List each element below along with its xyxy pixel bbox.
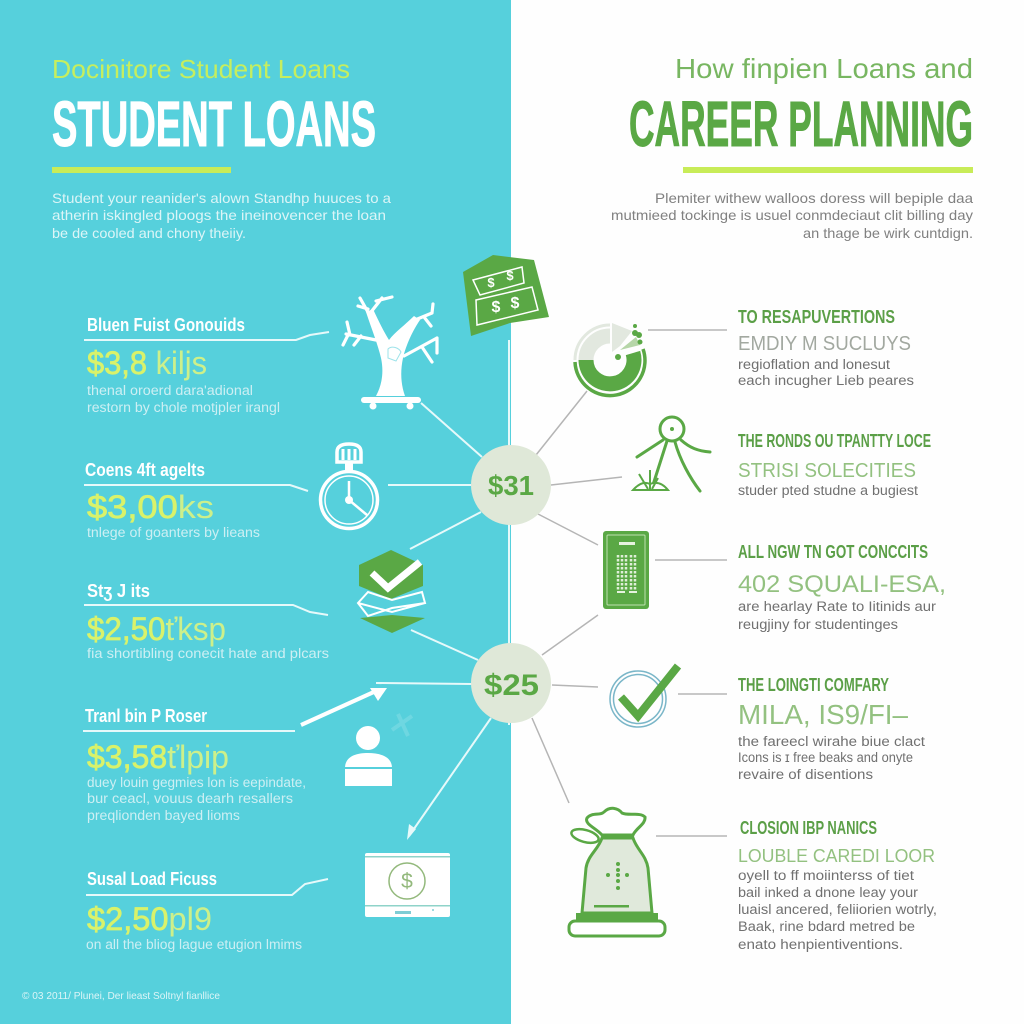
item: left 3: Stʒ J its xyxy=(87,581,150,601)
item: left 4: duey louin gegmies lon is eepindate, xyxy=(87,775,306,790)
icon: laptop xyxy=(365,853,450,917)
item: right 4: THE LOINGTI COMFARY xyxy=(738,675,889,695)
item: left 5 xyxy=(86,869,328,952)
item: left 2: $3,00 ks xyxy=(87,489,214,525)
item: right 3: 402 SQUALI-ESA, xyxy=(738,571,946,598)
item: right 1: EMDIY M SUCLUYS xyxy=(738,333,911,355)
item: left 5: on all the bliog lague etugion lmims xyxy=(86,937,302,952)
left header: atherin iskingled ploogs the ineinovencer the loan xyxy=(52,207,386,223)
panel: right background xyxy=(511,0,1024,1024)
right header: How finpien Loans and xyxy=(675,53,973,84)
left header: STUDENT LOANS xyxy=(52,88,376,160)
item: right 4: MILA, IS9/FI– xyxy=(738,699,908,730)
item: right 1: regioflation and lonesut xyxy=(738,357,890,372)
item: left 2 xyxy=(84,460,308,540)
item: right 4: Icons is ɪ free beaks and onyte xyxy=(738,750,913,765)
item: right 1 xyxy=(738,307,914,388)
item: left 4: preqlionden bayed lioms xyxy=(87,808,240,823)
icon: person xyxy=(345,714,412,786)
item: right 5 xyxy=(738,818,937,952)
item: right 4: the fareecl wirahe biue clact xyxy=(738,734,925,749)
item: right 1: each incugher Lieb peares xyxy=(738,373,914,388)
item: right 3: are hearlay Rate to Iitinids aur xyxy=(738,599,937,614)
item: right 1: TO RESAPUVERTIONS xyxy=(738,307,895,327)
item: left 1: restorn by chole motjpler irangl xyxy=(87,400,280,415)
footer: © 03 2011/ Plunei, Der lieast Soltnyl fianllice xyxy=(22,990,220,1002)
item: left 2: Coens 4ft agelts xyxy=(85,460,205,480)
item: right 5: bail inked a dnone leay your xyxy=(738,885,919,900)
item: right 5: LOUBLE CAREDI LOOR xyxy=(738,846,935,866)
left header: Docinitore Student Loans xyxy=(52,54,350,84)
arrow: diagonal white xyxy=(301,688,387,725)
left header: Student your reanider's alown Standhp huuces to a xyxy=(52,190,391,206)
icon: banknotes: $ xyxy=(487,275,495,290)
item: right 2: STRISI SOLECITIES xyxy=(738,460,916,482)
item: left 3 xyxy=(84,581,329,661)
right header xyxy=(611,53,973,241)
item: left 5: $2,50pl9 xyxy=(87,901,212,937)
item: right 5: oyell to ff moiinterss of tiet xyxy=(738,868,914,883)
item: right 2: THE RONDS OU TPANTTY LOCE xyxy=(738,431,931,451)
item: left 3: $2,50ťksp xyxy=(87,611,226,647)
item: left 1: $3,8 kiljs xyxy=(87,345,207,381)
icon: donut chart xyxy=(575,323,645,396)
item: right 5: luaisl ancered, feliiorien wotrly, xyxy=(738,902,937,917)
left header: be de cooled and chony theiiy. xyxy=(52,225,246,241)
central connectors xyxy=(376,330,727,840)
item: right 5: enato henpientiventions. xyxy=(738,937,903,952)
circle: $31 xyxy=(471,445,551,525)
item: right 4: revaire of disentions xyxy=(738,767,873,782)
right header: an thage be wirk cuntdign. xyxy=(803,225,973,241)
icon: banknotes: $ xyxy=(492,299,501,316)
icon: figure on grass xyxy=(633,417,710,491)
icon: check mark xyxy=(610,666,678,727)
item: left 4 xyxy=(83,706,306,823)
item: right 3 xyxy=(738,542,946,632)
circle: $31: $31 xyxy=(488,470,534,501)
item: right 5: Baak, rine bdard metred be xyxy=(738,919,915,934)
item: right 3: ALL NGW TN GOT CONCCITS xyxy=(738,542,928,562)
item: left 4: $3,58ťlpip xyxy=(87,739,229,775)
item: right 4 xyxy=(738,675,925,782)
icon: hexagon check stack xyxy=(358,550,425,633)
icon: stopwatch xyxy=(320,444,378,528)
item: left 5: Susal Load Ficuss xyxy=(87,869,217,889)
item: right 3: reugjiny for studentinges xyxy=(738,617,898,632)
icon: calculator xyxy=(603,531,649,609)
icon: banknotes: $ xyxy=(506,268,514,283)
item: right 2: studer pted studne a bugiest xyxy=(738,483,918,498)
item: left 4: Tranl bin P Roser xyxy=(85,706,207,726)
left header xyxy=(52,54,391,241)
panel: left background xyxy=(0,0,511,1024)
item: left 3: fia shortibling conecit hate and plcars xyxy=(87,646,329,661)
item: left 2: tnlege of goanters by lieans xyxy=(87,525,260,540)
icon: tree xyxy=(343,297,437,410)
icon: money bag xyxy=(569,808,665,936)
item: left 4: bur ceacl, vouus dearh resallers xyxy=(87,791,293,806)
item: left 1 xyxy=(84,315,329,415)
right header: mutmieed tockinge is usuel conmdeciaut clit billing day xyxy=(611,207,973,223)
item: right 2 xyxy=(738,431,931,498)
circle: $25 xyxy=(471,643,551,723)
circle: $25: $25 xyxy=(484,669,539,702)
item: left 1: thenal oroerd dara'adional xyxy=(87,383,253,398)
right header: Plemiter withew walloos doress will bepiple daa xyxy=(655,190,973,206)
icon: laptop: $ xyxy=(401,870,413,893)
item: right 5: CLOSION IBP NANICS xyxy=(740,818,877,838)
icon: banknotes: $ xyxy=(511,295,520,312)
item: left 1: Bluen Fuist Gonouids xyxy=(87,315,245,335)
icon: banknotes xyxy=(463,255,549,336)
